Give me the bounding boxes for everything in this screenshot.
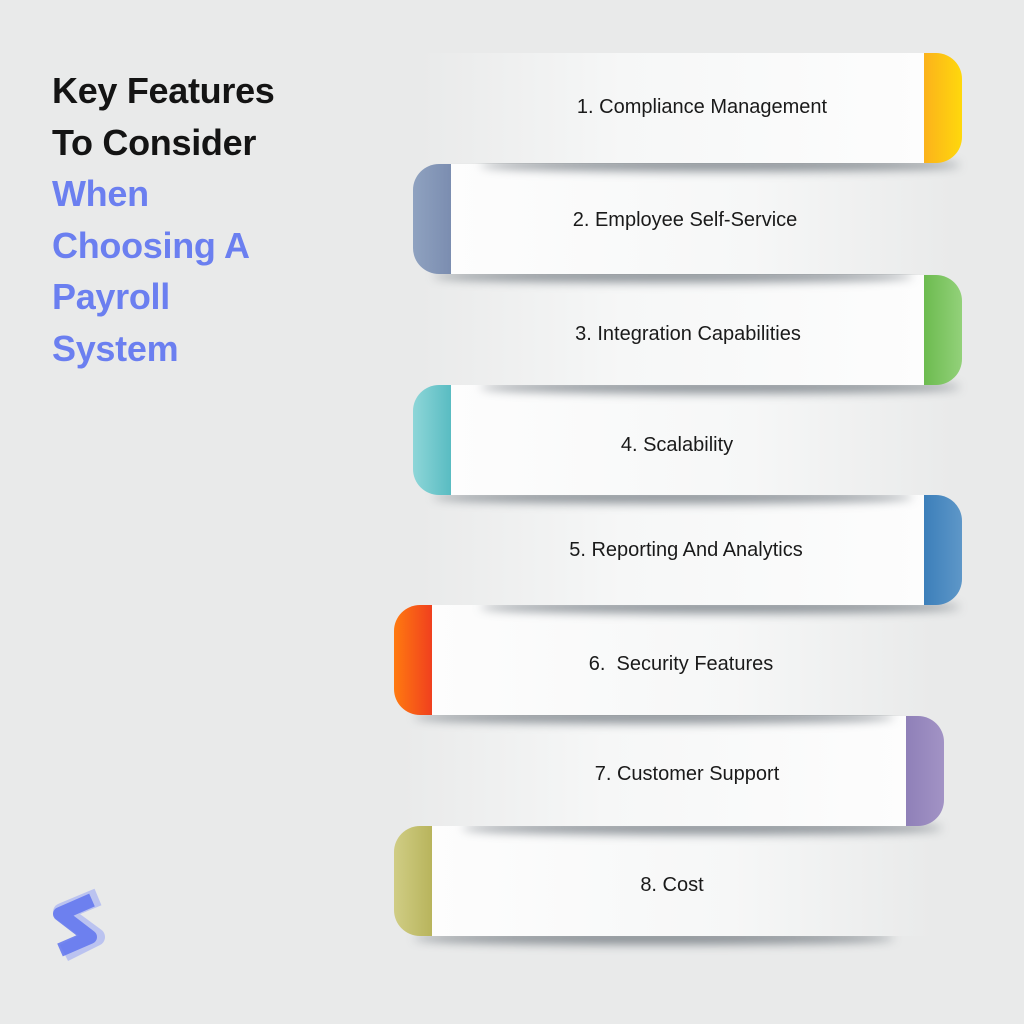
title [52,70,275,368]
card 4 [413,385,914,510]
text: 5. Reporting And Analytics [569,539,803,561]
title: Choosing A [52,224,250,266]
card 8 [394,826,894,951]
title: Key Features [52,70,275,111]
card 2 [413,164,914,289]
card 6 [394,605,894,730]
card 5 [480,495,962,620]
text: 3. Integration Capabilities [575,323,801,345]
text: 6. Security Features [589,653,773,675]
text: 8. Cost [640,874,704,896]
text: 7. Customer Support [595,763,779,785]
logo icon [53,888,105,961]
text: 2. Employee Self-Service [573,209,797,231]
title: System [52,328,178,368]
card 7 [462,716,944,841]
title: When [52,173,149,214]
text: 1. Compliance Management [577,96,827,118]
title: To Consider [52,122,256,162]
text: 4. Scalability [621,434,733,456]
card 3 [480,275,962,400]
card 1 [480,53,962,178]
title: Payroll [52,276,170,317]
